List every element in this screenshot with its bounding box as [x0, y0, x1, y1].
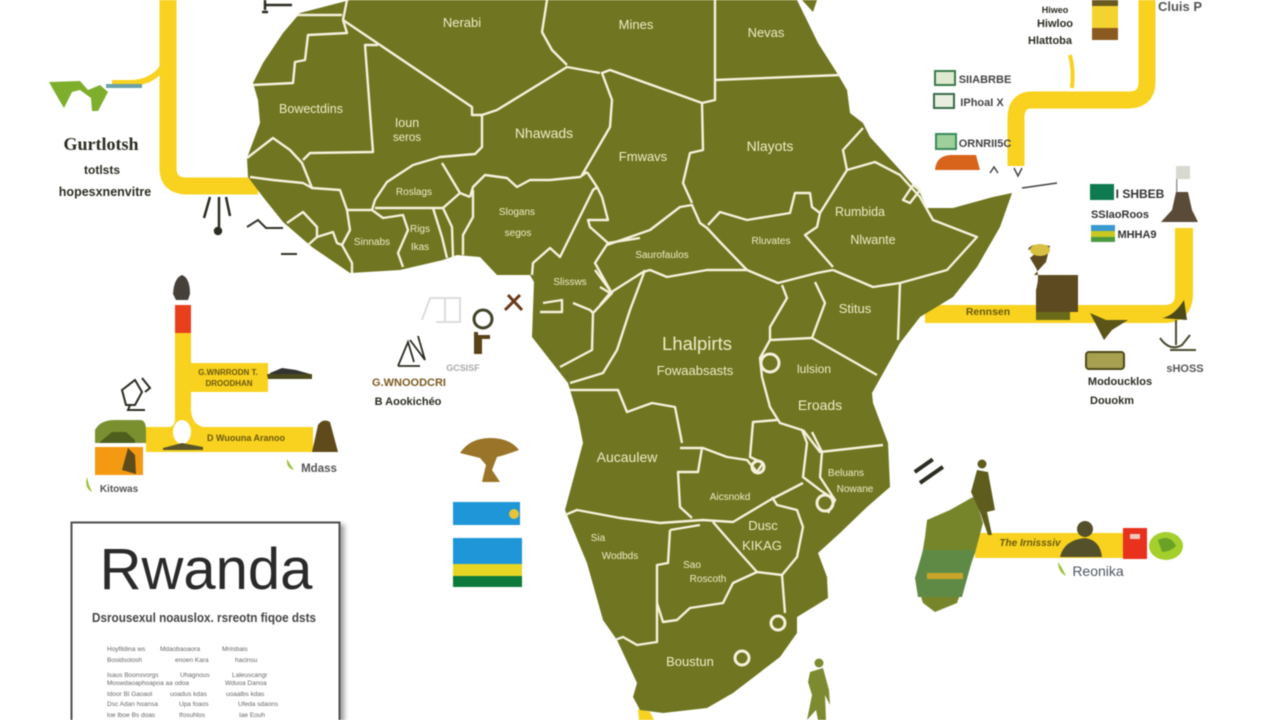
country labels: Mines	[619, 17, 654, 32]
icon: faint gulf sketch	[422, 298, 460, 322]
country labels: Aicsnokd	[710, 492, 750, 503]
fine print columns: Isaus Boonsvorgs	[107, 672, 159, 679]
map of Africa	[247, 0, 1012, 713]
text: west chart labels: Mdass	[301, 463, 337, 475]
legend: northeast keys: SIIABRBE	[959, 74, 1011, 86]
icon: east bird and vehicle	[1086, 313, 1128, 369]
icon: small leaf by Reonika	[1058, 562, 1066, 576]
country labels: Fmwavs	[619, 149, 668, 164]
text: east caption: sHOSS	[1166, 363, 1204, 375]
icon: white mound with strip	[163, 420, 203, 450]
text: northwest caption: Gurtlotsh	[63, 134, 139, 154]
text: northeast top caption: Hlattoba	[1028, 35, 1073, 47]
fine print columns: Hoyfildina ws	[107, 646, 146, 653]
country labels: Lhalpirts	[662, 333, 732, 354]
icon: northwest tools	[204, 197, 230, 234]
country labels: Rumbida	[835, 205, 885, 219]
flag: Rwanda small	[453, 502, 520, 525]
country labels: Slogans	[499, 207, 535, 218]
text: gulf caption: B Aookichéo	[375, 396, 442, 408]
text: east caption	[966, 306, 1204, 407]
country labels: Roslags	[396, 187, 432, 198]
country labels: Boustun	[666, 654, 714, 669]
country labels: Nhawads	[515, 125, 573, 141]
text: west chart labels: G.WNRRODN T.	[198, 368, 258, 377]
yellow connector: northwest pipe	[112, 0, 258, 186]
icon: red box	[1123, 528, 1147, 559]
text: northwest caption: hopesxnenvitre	[59, 185, 151, 199]
country labels: Roscoth	[690, 574, 726, 585]
icon: coastal marks	[247, 220, 297, 254]
legend: northeast keys	[934, 71, 1011, 170]
fine print columns: Moswdaoaphoapoa aa odoa	[107, 680, 189, 687]
icon: acacia tree	[460, 438, 519, 482]
text: northwest caption	[59, 134, 151, 199]
country labels: segos	[505, 228, 531, 239]
country labels: Rluvates	[752, 236, 790, 247]
fine print columns: loe lboe Bs doas	[107, 712, 156, 719]
fine print columns: uoaalbs kdas	[226, 691, 265, 698]
country labels: Saurofaulos	[635, 250, 689, 261]
text: west chart labels: D Wuouna Aranoo	[207, 433, 285, 443]
country labels	[279, 15, 896, 669]
text: northwest caption: totlsts	[84, 163, 120, 177]
country labels: Beluans	[828, 468, 864, 479]
text: east caption: Rennsen	[966, 306, 1010, 318]
fine print columns: Upa foaos	[179, 701, 209, 708]
country labels: Sao	[683, 560, 701, 571]
text: gulf caption	[372, 363, 480, 408]
text: gulf caption: GCSISF	[446, 363, 480, 373]
text: Madagascar band label: The Irnisssiv	[999, 538, 1062, 549]
icon: east tree sketch	[1160, 300, 1196, 350]
country labels: Fowaabsasts	[657, 363, 734, 378]
text: northeast top caption: Hiwloo	[1037, 18, 1073, 30]
icon: green cabbage	[1149, 532, 1183, 560]
text: east caption: Modoucklos	[1088, 376, 1152, 388]
fine print columns: uoadus kdas	[170, 691, 208, 698]
country labels: Ioun	[395, 116, 419, 130]
silhouette figure south	[807, 658, 830, 720]
Sinai fragment	[802, 0, 817, 12]
country labels: Dusc	[748, 518, 778, 533]
icon: west monument	[312, 421, 338, 452]
heading: Rwanda	[100, 537, 313, 602]
fine print columns: Mnlsbais	[222, 646, 248, 653]
legend: east flags and text: SSIaoRoos	[1091, 209, 1149, 221]
icon: west seated figure	[122, 448, 136, 474]
fine print columns: Wduoa Danoa	[225, 680, 267, 687]
fine print columns: Iae Eouh	[239, 712, 265, 719]
fine print columns: Idoor Bl Gaoaol	[107, 691, 153, 698]
country labels: Bowectdins	[279, 102, 343, 116]
country labels: KIKAG	[742, 538, 782, 553]
country labels: lulsion	[797, 362, 831, 376]
text: east caption: Douokm	[1090, 395, 1134, 407]
silhouette figure on Madagascar	[971, 460, 995, 535]
country labels: Nerabi	[443, 15, 481, 30]
icon: east tree and animal	[1028, 244, 1078, 320]
text: west chart labels: DROODHAN	[205, 379, 253, 388]
legend: east flags and text	[1090, 184, 1165, 242]
country labels: Stitus	[839, 301, 872, 316]
icon: east hut with flag	[1161, 166, 1198, 222]
panel: Rwanda title card	[72, 522, 340, 720]
country labels: Ikas	[411, 242, 429, 253]
icon: west volcano top	[173, 275, 190, 300]
yellow tip below the Cape	[638, 709, 654, 720]
country labels: Sia	[591, 533, 606, 544]
country labels: Nlayots	[747, 138, 793, 154]
icon: west elephant tile	[95, 420, 146, 443]
legend: northeast keys: IPhoaI X	[960, 97, 1004, 109]
fine print columns: Mdaobaoaora	[160, 646, 200, 653]
fine print columns: Uhagnous	[180, 672, 210, 679]
text: Madagascar band label	[999, 538, 1124, 579]
yellow connector: Madagascar band	[975, 533, 1125, 558]
text: gulf caption: G.WNOODCRI	[372, 377, 446, 389]
text: west chart labels	[100, 368, 337, 495]
icon: gulf sketches	[398, 295, 522, 366]
small circular lakes	[735, 354, 833, 665]
country labels: Sinnabs	[354, 237, 390, 248]
yellow connector: west branching chart	[95, 305, 313, 475]
country borders	[247, 0, 977, 645]
country labels: Eroads	[798, 397, 842, 413]
country labels: seros	[393, 132, 421, 144]
legend: northeast keys: ORNRII5C	[959, 138, 1011, 150]
country labels: Nowane	[837, 484, 874, 495]
icon: Red Sea marks	[990, 167, 1057, 188]
yellow connector: east pipe	[925, 228, 1184, 314]
fine print columns: hacinsu	[235, 657, 258, 664]
fine print columns: Ufeda sdaons	[238, 701, 279, 708]
text: northeast top caption: Hiweo	[1042, 5, 1069, 15]
fine print columns: Ifosuhlos	[179, 712, 206, 719]
icon: northeast building	[1092, 0, 1118, 40]
yellow connector: northeast pipe	[1016, 0, 1147, 166]
icon: Madagascar band figure	[1060, 521, 1102, 557]
text: northeast top caption	[1028, 0, 1202, 47]
country labels: Aucaulew	[597, 449, 658, 465]
fine print columns	[107, 646, 279, 719]
fine print columns: Bosidsolosh	[107, 657, 142, 664]
legend: east flags and text: MHHA9	[1117, 229, 1157, 241]
text: west chart labels: Kitowas	[100, 484, 139, 495]
country labels: Rigs	[410, 224, 430, 235]
legend: east flags and text: I SHBEB	[1116, 187, 1165, 201]
fine print columns: enoen Kara	[175, 657, 209, 664]
flag: Rwanda tricolour	[453, 538, 522, 587]
icon: green mini map	[49, 81, 142, 111]
Madagascar island	[915, 497, 983, 612]
icon: small green leaves	[86, 459, 294, 492]
icon: west pot sketch	[122, 378, 150, 410]
mainland silhouette	[247, 0, 1012, 713]
icon: west treeline	[267, 368, 312, 379]
country labels: Slissws	[553, 277, 587, 288]
country labels: Nevas	[748, 25, 785, 40]
text: islands tag	[912, 455, 944, 485]
country labels: Nlwante	[850, 233, 896, 247]
fine print columns: Laleuscangr	[232, 672, 268, 679]
subtitle: Dsrousexul noauslox. rsreotn fiqoe dsts	[92, 610, 316, 625]
fine print columns: Dsc Adan hoansa	[107, 701, 158, 708]
text: Madagascar band label: Reonika	[1072, 563, 1124, 579]
country labels: Wodbds	[602, 551, 638, 562]
icon: top tool sketch	[262, 0, 292, 12]
